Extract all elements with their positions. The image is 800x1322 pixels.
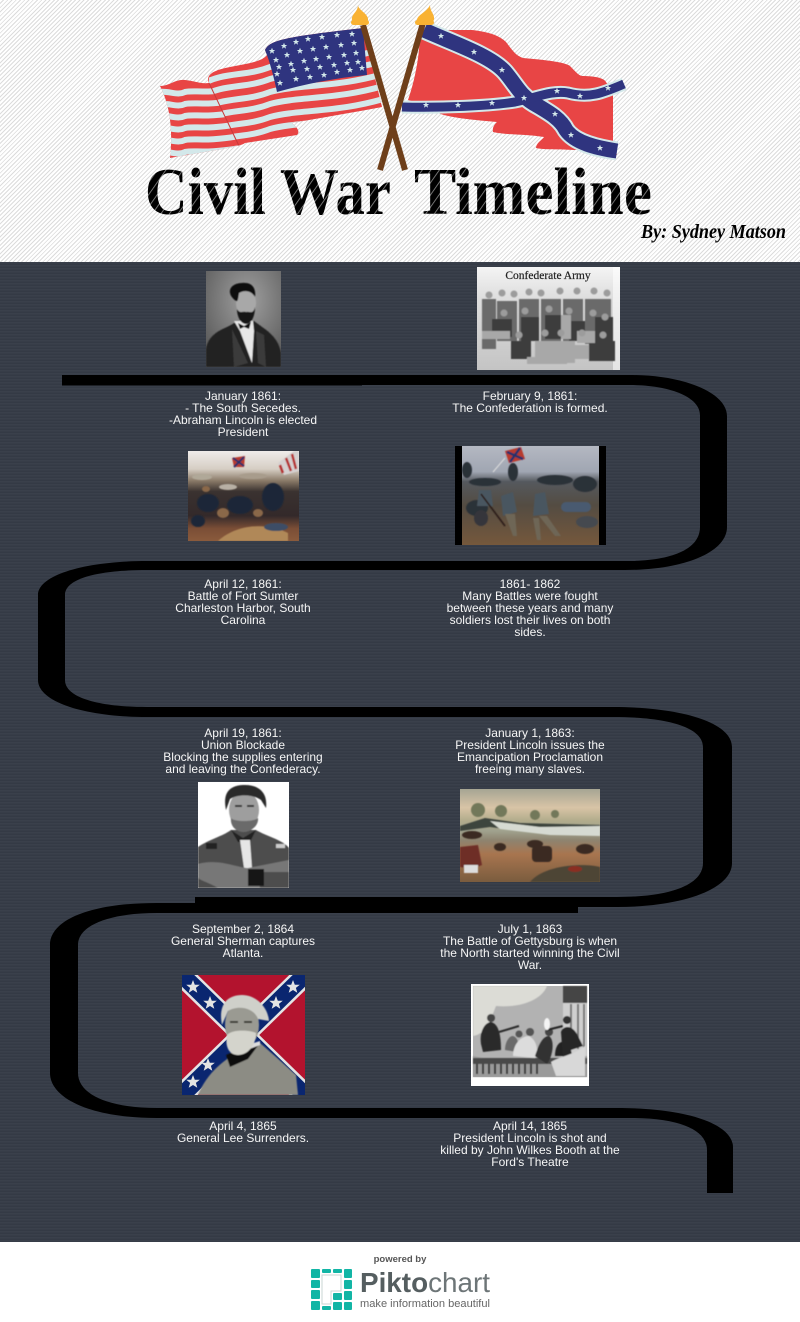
logo mark <box>311 1269 352 1310</box>
caption: April 19 1861: April 19, 1861: <box>204 726 282 740</box>
timeline background panel <box>0 262 800 1242</box>
caption: July 1 1863: The Battle of Gettysburg is when <box>443 934 617 948</box>
caption: January 1861: President <box>218 425 268 439</box>
flag poles <box>363 23 423 170</box>
union flag <box>150 28 390 158</box>
header panel <box>0 0 800 262</box>
caption: April 19 1861: Union Blockade <box>201 738 285 752</box>
caption: January 1861: January 1861: <box>205 389 281 403</box>
caption: 1861-1862 <box>447 577 614 639</box>
caption: February 9 1861: The Confederation is formed. <box>452 401 608 415</box>
caption: September 2 1864 <box>171 922 315 960</box>
caption: April 14 1865: President Lincoln is shot and <box>453 1131 607 1145</box>
caption: January 1861 <box>169 389 317 439</box>
caption: July 1 1863: July 1, 1863 <box>498 922 562 936</box>
caption: April 14 1865: April 14, 1865 <box>493 1119 567 1133</box>
title <box>145 160 652 225</box>
photo: Robert E. Lee with battle flag <box>182 975 305 1095</box>
union canton <box>265 28 367 92</box>
caption: April 19 1861: and leaving the Confederacy. <box>165 762 321 776</box>
painting: Many battles <box>455 446 606 545</box>
caption: April 12 1861: Carolina <box>221 613 265 627</box>
caption: January 1861: -Abraham Lincoln is elected <box>169 413 317 427</box>
caption: January 1 1863 <box>455 726 605 776</box>
caption: April 14 1865 <box>440 1119 620 1169</box>
caption: January 1 1863: President Lincoln issues the <box>455 738 605 752</box>
caption: July 1 1863: War. <box>518 958 542 972</box>
caption: September 2 1864: September 2, 1864 <box>192 922 294 936</box>
caption: April 4 1865 <box>177 1119 309 1145</box>
caption: January 1 1863: freeing many slaves. <box>475 762 585 776</box>
painting: Gettysburg battlefield <box>460 789 600 882</box>
caption: April 19 1861 <box>163 726 323 776</box>
caption: April 4 1865: April 4, 1865 <box>209 1119 277 1133</box>
caption: 1861-1862: between these years and many <box>447 601 613 615</box>
photo: General Sherman portrait <box>198 782 289 888</box>
caption: January 1 1863: January 1, 1863: <box>485 726 575 740</box>
caption: 1861-1862: soldiers lost their lives on both <box>450 613 610 627</box>
caption: April 12 1861: Charleston Harbor, South <box>175 601 311 615</box>
tagline: make information beautiful <box>360 1298 490 1310</box>
caption: July 1 1863: the North started winning the Civil <box>440 946 620 960</box>
painting: Battle of Fort Sumter <box>188 451 299 541</box>
photo: Abraham Lincoln <box>206 271 281 367</box>
wordmark: Piktochart <box>360 1267 490 1298</box>
caption: April 12 1861: Battle of Fort Sumter <box>188 589 298 603</box>
caption: September 2 1864: Atlanta. <box>223 946 263 960</box>
powered by label: powered by <box>374 1254 427 1265</box>
caption: April 4 1865: General Lee Surrenders. <box>177 1131 309 1145</box>
caption: 1861-1862: sides. <box>514 625 546 639</box>
print: Assassination of President Lincoln <box>471 984 589 1086</box>
confederate flag <box>402 30 624 155</box>
pole flames <box>351 5 434 25</box>
caption: 1861-1862: 1861- 1862 <box>500 577 560 591</box>
caption: February 9 1861 <box>452 389 608 415</box>
byline: By: Sydney Matson <box>640 221 786 243</box>
caption: July 1 1863 <box>440 922 620 972</box>
timeline ribbon <box>38 375 733 1193</box>
caption: April 19 1861: Blocking the supplies entering <box>163 750 323 764</box>
caption: April 14 1865: killed by John Wilkes Booth at the <box>440 1143 620 1157</box>
caption: January 1861: - The South Secedes. <box>185 401 301 415</box>
caption: February 9 1861: February 9, 1861: <box>483 389 577 403</box>
photo caption: Confederate Army <box>505 270 591 282</box>
footer branding <box>311 1254 490 1310</box>
caption: September 2 1864: General Sherman captures <box>171 934 315 948</box>
caption: January 1 1863: Emancipation Proclamation <box>457 750 603 764</box>
caption: April 14 1865: Ford's Theatre <box>491 1155 569 1169</box>
caption: 1861-1862: Many Battles were fought <box>462 589 598 603</box>
crossed flags illustration <box>160 5 626 171</box>
caption: April 12 1861 <box>175 577 311 627</box>
footer panel <box>0 1242 800 1322</box>
caption: April 12 1861: April 12, 1861: <box>204 577 282 591</box>
photo: Confederate Army group <box>477 267 620 370</box>
